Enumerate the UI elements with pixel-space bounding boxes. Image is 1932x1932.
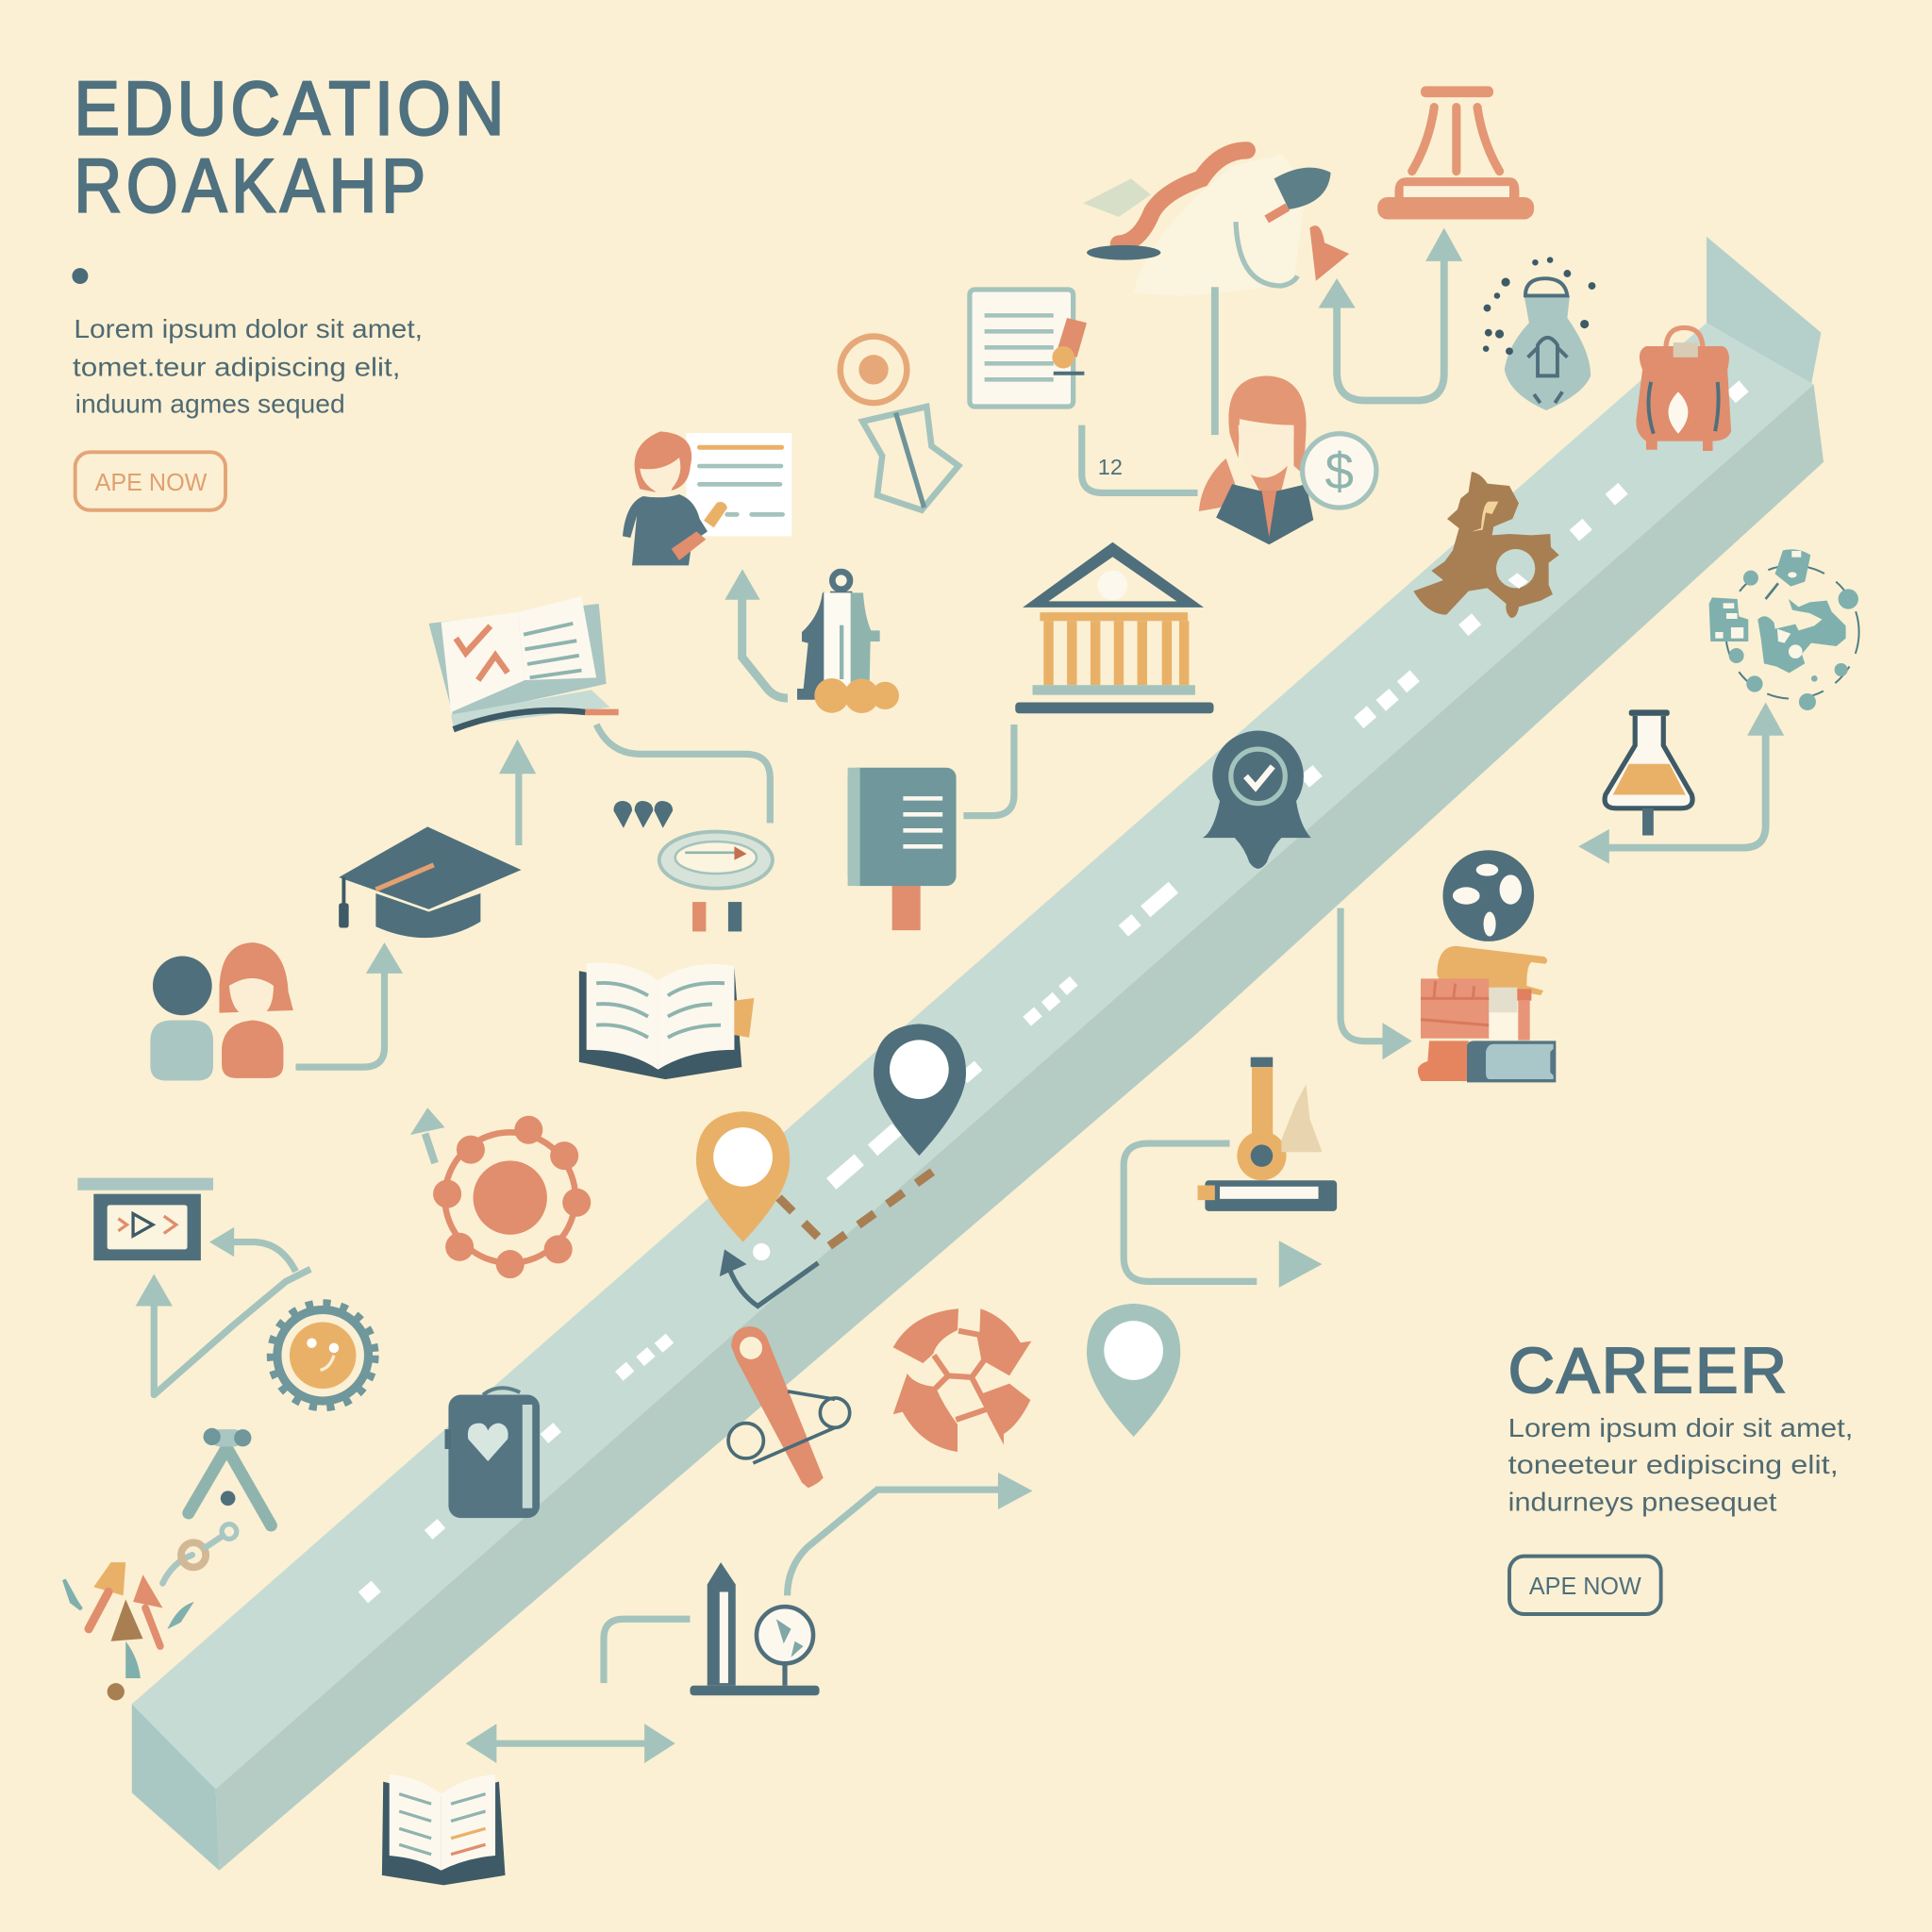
career text: Lorem ipsum doir sit amet, — [1508, 1413, 1853, 1442]
career text: toneeteur edipiscing elit, — [1508, 1450, 1839, 1479]
icon: video screen — [77, 1178, 213, 1260]
arrow: people to cap — [295, 942, 403, 1067]
arrow: connector with label 12: 12 — [1098, 455, 1123, 479]
title: ROAKAHP — [74, 143, 425, 229]
icon: arrows cluster — [64, 1562, 191, 1700]
title — [74, 66, 504, 229]
icon: atom circle — [1442, 850, 1534, 941]
icon: person with board — [623, 431, 791, 565]
icon: link and ring — [162, 1524, 237, 1583]
icon: map pin teal — [1087, 1304, 1180, 1437]
icon: microscope — [1198, 1058, 1337, 1211]
icon: orange ball — [893, 1308, 1031, 1452]
route: dashed brown — [778, 1164, 942, 1247]
intro text: tomet.teur adipiscing elit, — [73, 352, 400, 381]
career text: indurneys pnesequet — [1508, 1487, 1777, 1516]
arrow: connector to tower — [604, 1619, 690, 1683]
arrow: tower to right — [788, 1473, 1033, 1595]
arrow: book connector — [596, 724, 770, 823]
arrow: u-shaped double — [1319, 228, 1462, 400]
arrow: connector with label 12 — [1082, 425, 1198, 492]
icon: orange suitcase — [1636, 327, 1731, 451]
title: EDUCATION — [74, 66, 504, 151]
intro text: induum agmes sequed — [75, 390, 345, 419]
icon: document with pencil — [970, 290, 1087, 407]
icon: stack of books — [1418, 946, 1556, 1082]
diagonal road — [132, 237, 1824, 1871]
intro text — [73, 314, 423, 419]
icon: molecule ring — [433, 1116, 591, 1278]
icon: tower figure — [797, 572, 899, 713]
icon: brown gear blob — [1413, 472, 1559, 618]
icon: open book centre — [579, 962, 754, 1079]
arrow: road to books — [1341, 908, 1412, 1059]
career heading: CAREER — [1508, 1336, 1787, 1407]
icon: location pin dark — [874, 1024, 966, 1156]
arrow: globe to flask — [1578, 702, 1784, 864]
arrow: bracket to right — [1124, 1143, 1322, 1288]
icon: orange pillar — [1377, 86, 1534, 219]
icon: teal bulb with stars — [1483, 257, 1595, 410]
icon: target with bell — [841, 337, 958, 510]
arrow: cap to book — [499, 740, 536, 845]
intro text: Lorem ipsum dolor sit amet, — [74, 314, 423, 343]
icon: two people — [150, 942, 293, 1080]
icon: bank building — [1015, 542, 1214, 713]
arrow: ring small up — [410, 1108, 445, 1163]
icon: compass — [189, 1428, 271, 1525]
arrow: dark curved — [720, 1243, 818, 1306]
icon: open book bottom — [382, 1774, 506, 1885]
icon: flask — [1605, 709, 1692, 836]
icon: medal — [1203, 731, 1311, 869]
career text — [1508, 1413, 1853, 1516]
icon: plate with drops — [613, 801, 773, 931]
arrow: bank to book — [963, 724, 1014, 816]
icon: reclining figure — [1083, 150, 1349, 295]
button: apply now orange: APE NOW — [95, 468, 208, 496]
arrow: tower to person — [724, 569, 788, 698]
icon: smiling gear — [273, 1305, 374, 1406]
icon: businessman with coin: $ — [1324, 442, 1354, 501]
arrow: double headed — [466, 1724, 675, 1763]
icon: globe cluster — [1709, 549, 1859, 710]
icon: businessman with coin — [1199, 375, 1376, 544]
icon: teal book — [848, 768, 957, 930]
icon: location pin orange — [696, 1111, 790, 1242]
icon: graduation cap — [339, 826, 521, 938]
bullet dot — [72, 268, 88, 284]
icon: tower and globe — [690, 1562, 820, 1695]
icon: dark backpack — [445, 1388, 540, 1518]
button: apply now orange — [75, 452, 225, 510]
icon: wrench and pin — [728, 1326, 850, 1488]
button: apply now teal — [1509, 1557, 1661, 1614]
icon: open book with checks — [429, 596, 619, 729]
button: apply now teal: APE NOW — [1529, 1572, 1641, 1600]
arrow: v-shaped with branch — [136, 1227, 310, 1395]
arrow: vertical connector — [1211, 287, 1219, 435]
